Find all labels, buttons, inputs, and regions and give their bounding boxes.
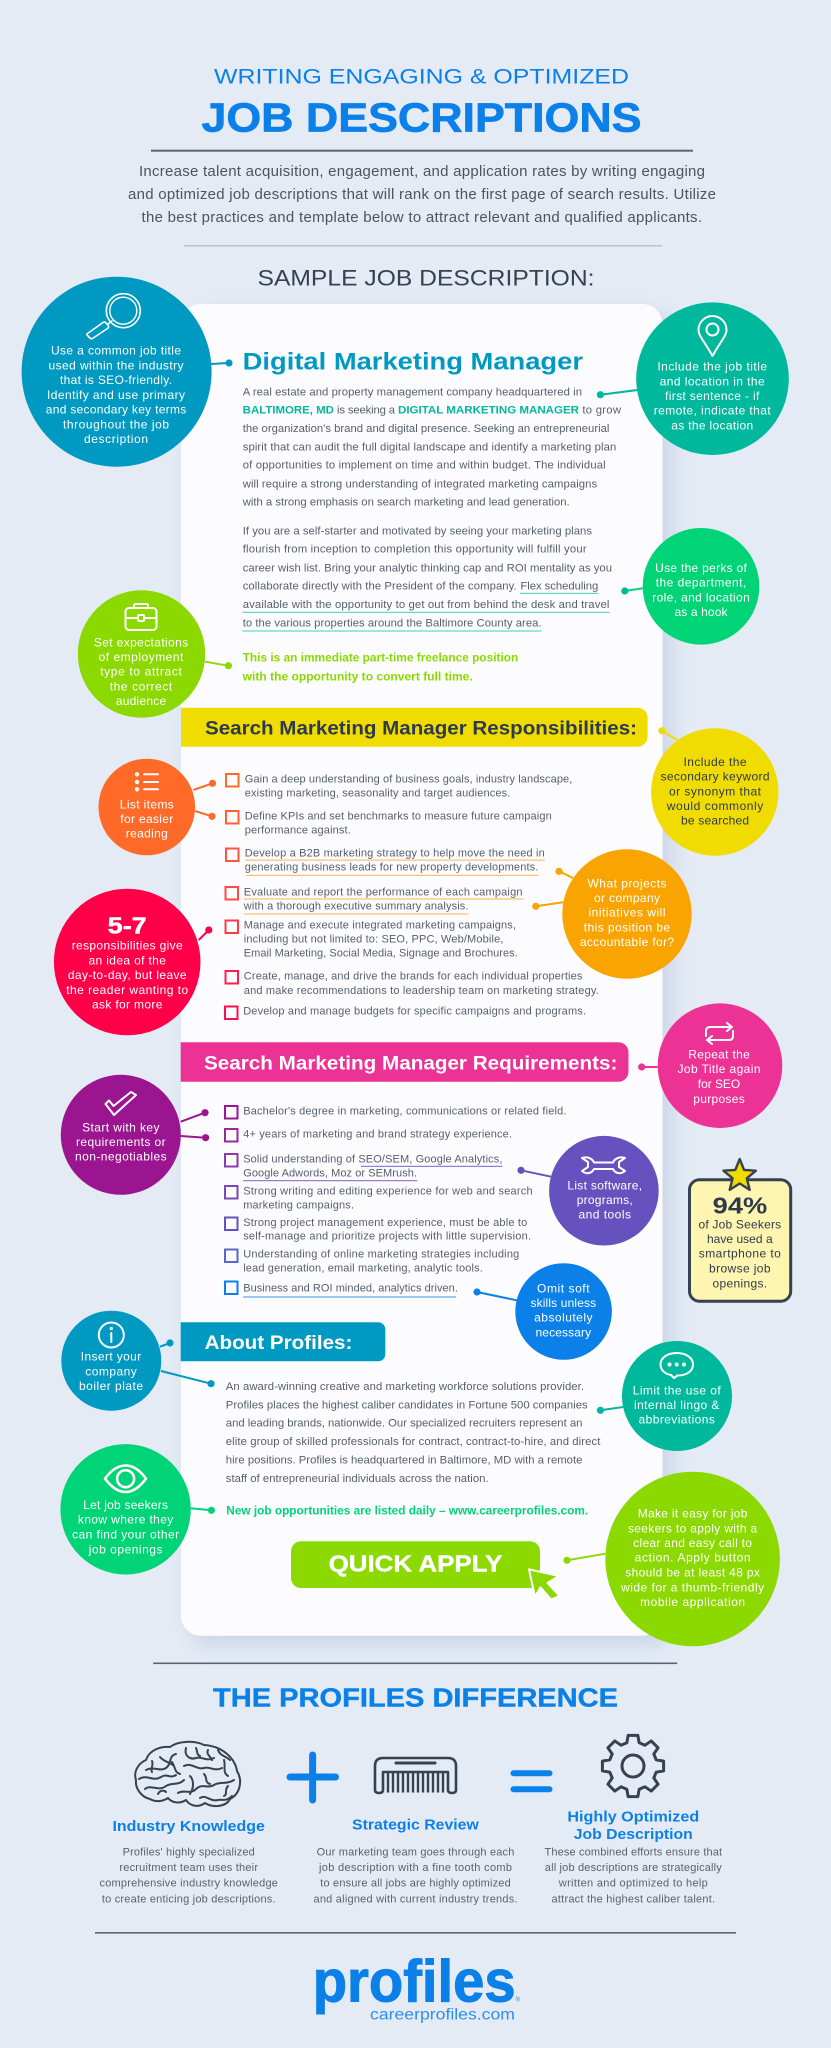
- callout: easy call to action: mobile application: [640, 1595, 745, 1609]
- title: [202, 64, 642, 141]
- callout: accountable projects: or company: [594, 891, 660, 905]
- responsibilities checklist: Define KPIs and set benchmarks to measure future campaign: [245, 810, 552, 822]
- stat card: 94%: of Job Seekers: [698, 1217, 781, 1231]
- callout: easy call to action: Make it easy for job: [638, 1507, 748, 1521]
- responsibilities checklist: and make recommendations to leadership team on marketing strategy.: [244, 985, 599, 997]
- responsibilities checklist: existing marketing, seasonality and target audiences.: [245, 788, 510, 800]
- column: strategic review: to ensure all jobs are highly optimized: [320, 1878, 511, 1890]
- callout: job title and location: first sentence - if: [665, 389, 760, 403]
- callout: accountable projects: initiatives will: [588, 906, 666, 920]
- logo: careerprofiles.com: [370, 2006, 515, 2023]
- callout: common job title: [22, 277, 233, 467]
- text block: first paragraph: with a strong emphasis on search marketing and lead generation.: [242, 497, 570, 509]
- text block: second paragraph: flourish from inception to completion this opportunity will fulfill your: [243, 544, 587, 556]
- text block: employment type: with the opportunity to convert full time.: [242, 669, 473, 683]
- quick apply button: [291, 1541, 540, 1588]
- column: strategic review: [314, 1818, 518, 1905]
- callout: accountable projects: [532, 849, 692, 979]
- callout: repeat job title: for SEO: [698, 1077, 740, 1091]
- callout: 5-7 responsibilities: responsibilities give: [72, 939, 183, 953]
- callout: common job title: Use a common job title: [51, 344, 181, 358]
- callout: list items: for easier: [120, 812, 173, 826]
- callout: common job title: throughout the job: [63, 417, 169, 431]
- callout: easy call to action: should be at least 48 px: [625, 1566, 760, 1580]
- callout: accountable projects: What projects: [588, 876, 666, 890]
- logo: ®: [516, 1997, 520, 2004]
- icon: cursor: [529, 1569, 560, 1600]
- callout: accountable projects: this position be: [584, 920, 671, 934]
- callout: employment type: the correct: [110, 679, 173, 693]
- callout: employment type: type to attract: [100, 665, 182, 679]
- responsibilities checklist: Develop and manage budgets for specific campaigns and programs.: [243, 1006, 586, 1018]
- text block: about: [226, 1381, 601, 1485]
- callout: soft skills: necessary: [536, 1325, 591, 1339]
- callout: 5-7 responsibilities: ask for more: [92, 998, 163, 1012]
- callout: soft skills: skills unless: [530, 1296, 596, 1310]
- callout: perks: Use the perks of: [655, 561, 748, 575]
- callout: boiler plate: company: [85, 1364, 137, 1378]
- callout: internal lingo: [597, 1341, 732, 1451]
- callout: employment type: of employment: [99, 650, 184, 664]
- text block: job listing link: New job opportunities are listed daily – www.careerprofiles.com.: [226, 1504, 588, 1518]
- callout: list items: reading: [126, 827, 168, 841]
- responsibilities checklist: Gain a deep understanding of business goals, industry landscape,: [245, 774, 572, 786]
- callout: key requirements: non-negotiables: [75, 1150, 167, 1164]
- column: industry knowledge: Profiles' highly specialized: [123, 1847, 255, 1859]
- callout: easy call to action: wide for a thumb-friendly: [620, 1580, 764, 1594]
- text block: second paragraph: [242, 525, 612, 632]
- callout: job title and location: and location in the: [660, 374, 765, 388]
- callout: boiler plate: [61, 1311, 215, 1411]
- stat card: 94%: [690, 1159, 791, 1301]
- callout: soft skills: absolutely: [534, 1311, 592, 1325]
- responsibilities banner: [181, 708, 648, 747]
- column: industry knowledge: comprehensive industry knowledge: [100, 1878, 278, 1890]
- column: industry knowledge: [100, 1819, 278, 1905]
- requirements checklist: Solid understanding of SEO/SEM, Google Analytics,: [243, 1154, 502, 1166]
- requirements checklist: Strong writing and editing experience for web and search: [243, 1186, 533, 1198]
- callout: job title and location: remote, indicate that: [654, 404, 771, 418]
- requirements checklist: marketing campaigns.: [243, 1200, 354, 1212]
- callout: common job title: description: [84, 432, 148, 446]
- requirements checklist: Bachelor's degree in marketing, communications or related field.: [243, 1105, 566, 1117]
- stat card: 94%: have used a: [707, 1232, 773, 1246]
- callout: easy call to action: action. Apply button: [635, 1551, 751, 1565]
- text block: about: Profiles places the highest caliber candidates in Fortune 500 companies: [226, 1399, 588, 1411]
- requirements checklist: Understanding of online marketing strategies including: [243, 1249, 519, 1261]
- stat card: 94%: browse job: [709, 1261, 771, 1275]
- callout: employment type: [78, 590, 232, 718]
- responsibilities checklist: including but not limited to: SEO, PPC, Web/Mobile,: [244, 933, 503, 945]
- column: strategic review: job description with a fine tooth comb: [318, 1862, 512, 1874]
- callout: perks: as a hook: [674, 605, 728, 619]
- callout: other job openings: can find your other: [72, 1527, 179, 1541]
- stat card: 94%: smartphone to: [699, 1247, 781, 1261]
- column: industry knowledge: recruitment team uses their: [119, 1862, 258, 1874]
- text block: first paragraph: A real estate and property management company headquartered in: [243, 386, 582, 398]
- icon: plus: [290, 1755, 336, 1800]
- text block: first paragraph: to grow: [582, 405, 622, 417]
- requirements banner: Search Marketing Manager Requirements:: [204, 1052, 617, 1074]
- responsibilities checklist: Email Marketing, Social Media, Signage and Brochures.: [244, 947, 518, 959]
- text block: first paragraph: [242, 386, 622, 509]
- text block: first paragraph: of opportunities to implement on time and within budget. The individual: [243, 460, 606, 472]
- callout: other job openings: Let job seekers: [83, 1498, 168, 1512]
- callout: common job title: and secondary key terms: [46, 403, 186, 417]
- column: highly optimized: [544, 1809, 722, 1905]
- callout: secondary keyword: or synonym that: [669, 784, 762, 798]
- callout: soft skills: Omit soft: [537, 1281, 590, 1295]
- column: highly optimized: Highly Optimized: [567, 1809, 699, 1825]
- callout: secondary keyword: would commonly: [666, 799, 763, 813]
- callout: common job title: that is SEO-friendly.: [60, 373, 172, 387]
- callout: secondary keyword: Include the: [684, 755, 747, 769]
- job title heading: Digital Marketing Manager: [243, 348, 583, 375]
- column: highly optimized: written and optimized to help: [558, 1878, 708, 1890]
- callout: software and tools: List software,: [567, 1178, 642, 1192]
- heading: sample job description: SAMPLE JOB DESCRIPTION:: [258, 266, 594, 291]
- text block: employment type: This is an immediate part-time freelance position: [243, 651, 518, 665]
- logo: profiles: [313, 1949, 516, 2015]
- heading: the profiles difference: THE PROFILES DIFFERENCE: [213, 1683, 618, 1713]
- callout: accountable projects: accountable for?: [580, 935, 674, 949]
- callout: easy call to action: seekers to apply with a: [628, 1521, 758, 1535]
- responsibilities checklist: Manage and execute integrated marketing campaigns,: [244, 920, 516, 932]
- intro text: [128, 163, 716, 226]
- callout: key requirements: [61, 1075, 209, 1195]
- responsibilities checklist: Evaluate and report the performance of each campaign: [244, 886, 523, 898]
- text block: employment type: [242, 651, 518, 683]
- callout: 5-7 responsibilities: 5-7: [108, 912, 147, 938]
- responsibilities checklist: generating business leads for new property developments.: [245, 862, 538, 874]
- requirements checklist: self-manage and prioritize projects with little supervision.: [243, 1231, 531, 1243]
- callout: perks: the department,: [656, 576, 746, 590]
- callout: secondary keyword: be searched: [681, 814, 749, 828]
- callout: software and tools: and tools: [578, 1208, 631, 1222]
- callout: job title and location: Include the job title: [657, 360, 767, 374]
- callout: list items: List items: [120, 797, 174, 811]
- callout: employment type: Set expectations: [94, 635, 188, 649]
- callout: repeat job title: purposes: [693, 1092, 745, 1106]
- text block: second paragraph: to the various properties around the Baltimore County area.: [243, 617, 542, 629]
- requirements checklist: Google Adwords, Moz or SEMrush.: [243, 1168, 417, 1180]
- responsibilities banner: Search Marketing Manager Responsibilities:: [205, 718, 637, 740]
- column: highly optimized: attract the highest caliber talent.: [552, 1893, 715, 1905]
- responsibilities checklist: Develop a B2B marketing strategy to help move the need in: [245, 848, 545, 860]
- icon: comb: [375, 1758, 456, 1793]
- text block: about: elite group of skilled professionals for contract, contract-to-hire, and direct: [226, 1436, 601, 1448]
- callout: secondary keyword: [651, 727, 778, 856]
- quick apply button: QUICK APPLY: [329, 1551, 502, 1577]
- callout: other job openings: [60, 1444, 215, 1575]
- stat card: 94%: openings.: [712, 1276, 767, 1290]
- responsibilities checklist: [225, 774, 599, 1019]
- callout: internal lingo: internal lingo &: [634, 1398, 719, 1412]
- text block: about: hire positions. Profiles is headquartered in Baltimore, MD with a remote: [226, 1454, 582, 1466]
- text block: second paragraph: collaborate directly with the President of the company.: [243, 581, 517, 593]
- column: strategic review: Strategic Review: [352, 1818, 480, 1834]
- callout: easy call to action: [563, 1472, 780, 1646]
- column: highly optimized: These combined efforts ensure that: [544, 1847, 722, 1859]
- callout: repeat job title: Repeat the: [688, 1048, 750, 1062]
- column: industry knowledge: to create enticing job descriptions.: [102, 1893, 276, 1905]
- text block: second paragraph: Flex scheduling: [520, 581, 598, 593]
- text block: second paragraph: available with the opportunity to get out from behind the desk and travel: [243, 599, 609, 611]
- column: strategic review: and aligned with current industry trends.: [314, 1893, 518, 1905]
- callout: boiler plate: Insert your: [81, 1350, 141, 1364]
- callout: software and tools: [517, 1136, 659, 1245]
- callout: 5-7 responsibilities: [54, 889, 212, 1035]
- intro text: the best practices and template below to attract relevant and qualified applicants.: [142, 209, 702, 226]
- intro text: Increase talent acquisition, engagement, and application rates by writing engaging: [139, 163, 705, 180]
- text block: first paragraph: BALTIMORE, MD: [243, 405, 334, 417]
- responsibilities checklist: Create, manage, and drive the brands for each individual properties: [244, 970, 583, 982]
- text block: second paragraph: career wish list. Bring your analytic thinking cap and ROI mentality as you: [243, 562, 612, 574]
- callout: 5-7 responsibilities: day-to-day, but leave: [68, 968, 187, 982]
- callout: common job title: used within the industry: [48, 358, 184, 372]
- text block: first paragraph: spirit that can audit the full digital landscape and identify a marketing plan: [243, 441, 616, 453]
- text block: first paragraph: will require a strong understanding of integrated marketing campaigns: [242, 478, 598, 490]
- callout: other job openings: know where they: [78, 1513, 173, 1527]
- callout: secondary keyword: secondary keyword: [660, 770, 770, 784]
- responsibilities checklist: performance against.: [245, 824, 351, 836]
- title: JOB DESCRIPTIONS: [202, 95, 642, 141]
- callout: perks: [621, 528, 759, 645]
- callout: list items: [98, 759, 216, 855]
- callout: perks: role, and location: [652, 590, 750, 604]
- text block: about: staff of entrepreneurial individuals across the nation.: [226, 1473, 489, 1485]
- callout: job title and location: [597, 302, 789, 455]
- text block: second paragraph: If you are a self-starter and motivated by seeing your marketing plans: [243, 525, 592, 537]
- text block: first paragraph: the organization's brand and digital presence. Seeking an entrepreneurial: [243, 423, 609, 435]
- requirements checklist: [225, 1105, 566, 1298]
- callout: software and tools: programs,: [577, 1193, 633, 1207]
- column: highly optimized: all job descriptions are strategically: [545, 1862, 722, 1874]
- callout: soft skills: [473, 1263, 612, 1360]
- text block: about: An award-winning creative and marketing workforce solutions provider.: [226, 1381, 584, 1393]
- requirements checklist: Business and ROI minded, analytics driven.: [243, 1283, 458, 1295]
- callout: common job title: Identify and use primary: [47, 388, 185, 402]
- callout: other job openings: job openings: [88, 1542, 162, 1556]
- intro text: and optimized job descriptions that will rank on the first page of search results. Utilize: [128, 186, 716, 203]
- icon: gear: [602, 1735, 664, 1797]
- callout: 5-7 responsibilities: an idea of the: [88, 953, 166, 967]
- callout: job title and location: as the location: [671, 418, 753, 432]
- stat card: 94%: 94%: [713, 1192, 767, 1218]
- about banner: [181, 1322, 385, 1361]
- panel: job description card: [181, 304, 662, 1636]
- requirements banner: [181, 1042, 628, 1082]
- responsibilities checklist: with a thorough executive summary analysis.: [243, 900, 468, 912]
- column: strategic review: Our marketing team goes through each: [317, 1847, 514, 1859]
- text block: about: and leading brands, nationwide. Our specialized recruiters represent an: [226, 1418, 582, 1430]
- requirements checklist: 4+ years of marketing and brand strategy experience.: [243, 1129, 512, 1141]
- callout: repeat job title: [638, 1003, 782, 1128]
- callout: internal lingo: abbreviations: [639, 1413, 715, 1427]
- requirements checklist: lead generation, email marketing, analytic tools.: [243, 1263, 483, 1275]
- title: WRITING ENGAGING & OPTIMIZED: [214, 64, 629, 88]
- text block: first paragraph: is seeking a: [337, 405, 396, 417]
- icon: brain: [135, 1742, 240, 1806]
- requirements checklist: Strong project management experience, must be able to: [243, 1217, 527, 1229]
- callout: key requirements: Start with key: [82, 1120, 160, 1134]
- column: highly optimized: Job Description: [574, 1827, 693, 1843]
- text block: first paragraph: DIGITAL MARKETING MANAGER: [398, 405, 579, 417]
- callout: internal lingo: Limit the use of: [633, 1383, 721, 1397]
- callout: key requirements: requirements or: [76, 1135, 166, 1149]
- column: industry knowledge: Industry Knowledge: [112, 1819, 265, 1835]
- callout: employment type: audience: [116, 694, 166, 708]
- icon: equals: [514, 1773, 550, 1789]
- callout: boiler plate: boiler plate: [79, 1379, 143, 1393]
- about banner: About Profiles:: [205, 1332, 352, 1354]
- callout: easy call to action: clear and easy call to: [633, 1536, 752, 1550]
- callout: repeat job title: Job Title again: [678, 1062, 760, 1076]
- callout: 5-7 responsibilities: the reader wanting to: [66, 983, 189, 997]
